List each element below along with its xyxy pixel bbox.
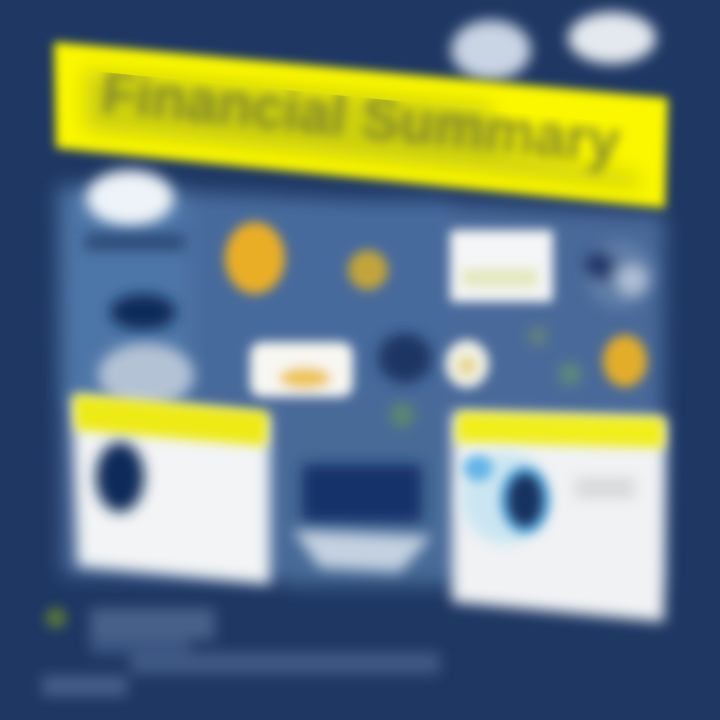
title text: Financial Summary bbox=[99, 58, 623, 176]
icon: dark badge left bbox=[110, 294, 176, 330]
footer text bbox=[42, 608, 440, 696]
laptop screen bbox=[302, 464, 422, 522]
right card text line bbox=[575, 478, 635, 498]
icon: cloud left bbox=[86, 170, 174, 226]
panel: central illustration bbox=[58, 185, 665, 590]
footer: check icon bbox=[45, 607, 67, 629]
right card yellow header bbox=[456, 412, 664, 448]
panel: right card bbox=[452, 412, 666, 622]
icon: small light badge bbox=[445, 340, 489, 388]
icon: small coin bbox=[348, 250, 388, 290]
laptop base bbox=[293, 530, 432, 572]
icon: small green marks bbox=[390, 328, 581, 427]
card: central label bbox=[250, 342, 353, 397]
text: left label bbox=[85, 234, 185, 250]
icon: cloud lower left bbox=[98, 343, 194, 407]
left card icon bbox=[96, 442, 144, 512]
right card icon bbox=[461, 452, 550, 544]
icon: large coin bbox=[225, 222, 285, 294]
title banner bbox=[54, 42, 668, 208]
illustration: center laptop bbox=[293, 464, 432, 572]
left card yellow header bbox=[74, 395, 268, 446]
icon: clock upper right bbox=[585, 241, 654, 309]
panel: left card bbox=[72, 395, 270, 584]
icon: dark circle center bbox=[378, 333, 432, 383]
card: upper right chart bbox=[450, 230, 553, 302]
icon: coin right bbox=[603, 335, 647, 387]
icon: top clouds bbox=[451, 12, 656, 80]
